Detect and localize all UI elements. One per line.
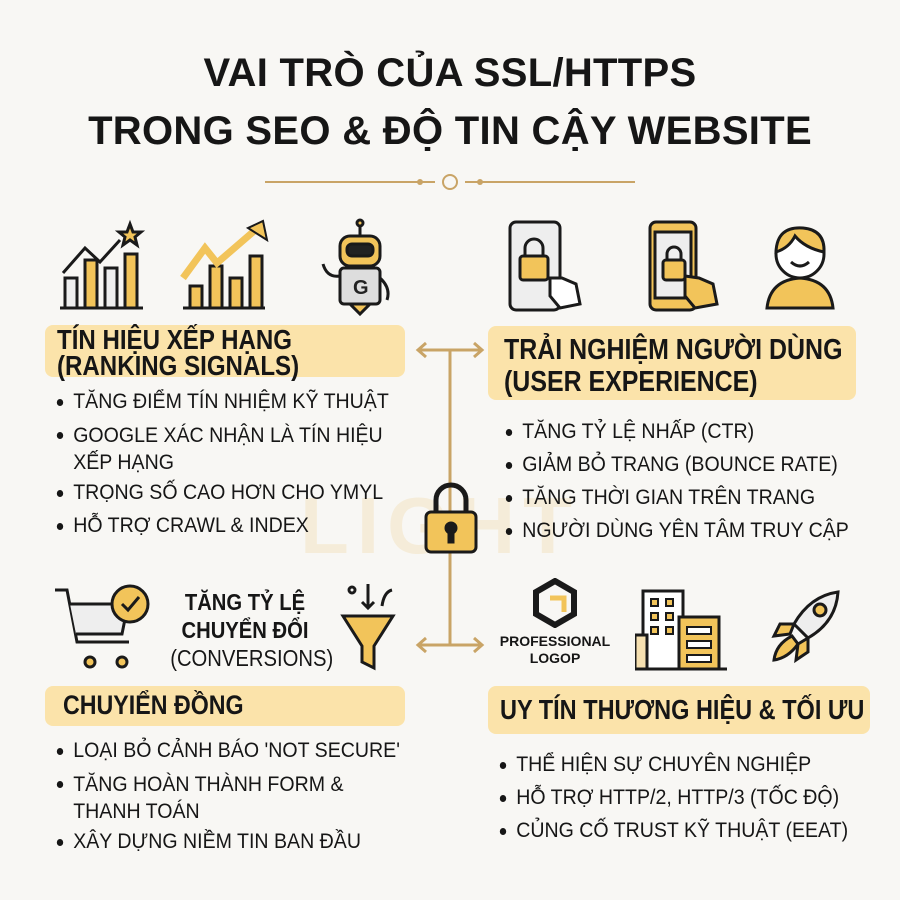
heading: ranking signals: TÍN HIỆU XẾP HẠNG <box>57 324 292 355</box>
heading: user experience: TRẢI NGHIỆM NGƯỜI DÙNG <box>504 334 842 366</box>
bullets: ranking: HỖ TRỢ CRAWL & INDEX <box>73 513 309 537</box>
heading: brand <box>488 686 870 734</box>
bullets: UX: TĂNG THỜI GIAN TRÊN TRANG <box>522 485 815 509</box>
icon: building <box>635 590 727 670</box>
icon: funnel <box>340 584 396 670</box>
icon: robot <box>323 220 388 314</box>
bullets: ranking: GOOGLE XÁC NHẬN LÀ TÍN HIỆU <box>73 423 383 447</box>
panel: conversion trust <box>45 686 405 853</box>
bullets: brand: HỖ TRỢ HTTP/2, HTTP/3 (TỐC ĐỘ) <box>516 785 839 809</box>
icon: robot: G <box>353 277 369 299</box>
icon: user <box>767 228 833 308</box>
heading: ranking signals <box>45 325 405 377</box>
center connector with arrows <box>416 342 484 653</box>
bullets: ranking: TRỌNG SỐ CAO HƠN CHO YMYL <box>73 480 383 504</box>
bullets: ranking: TĂNG ĐIỂM TÍN NHIỆM KỸ THUẬT <box>73 389 389 413</box>
bullets: brand: CỦNG CỐ TRUST KỸ THUẬT (EEAT) <box>516 818 848 842</box>
text: conversions: CHUYỂN ĐỔI <box>181 617 309 643</box>
watermark: LIGHT <box>300 481 580 570</box>
icons: ranking <box>60 218 390 316</box>
title <box>88 50 812 153</box>
divider ornament <box>265 174 635 190</box>
panel: ranking signals <box>45 324 405 537</box>
icon: phone lock 2 <box>650 222 717 310</box>
bullets: conversion <box>56 738 400 853</box>
icons: user experience <box>508 220 835 312</box>
icon: professional logo: LOGOP <box>530 650 580 666</box>
heading: chuyen dong: CHUYIỂN ĐỒNG <box>63 690 244 720</box>
bullets: UX <box>506 418 849 542</box>
icon: cart <box>55 584 150 668</box>
icon: phone lock <box>510 222 580 310</box>
bullets: conversion: TĂNG HOÀN THÀNH FORM & <box>73 772 344 796</box>
text: conversions: TĂNG TỶ LỆ <box>185 589 305 615</box>
text: conversions: (CONVERSIONS) <box>170 645 333 671</box>
icon: professional logo <box>500 578 610 666</box>
icon: rocket <box>772 590 840 664</box>
bullets: ranking: XẾP HẠNG <box>73 450 174 474</box>
conversions row <box>55 584 396 671</box>
bullets: UX: NGƯỜI DÙNG YÊN TÂM TRUY CẬP <box>522 518 849 542</box>
text: conversions <box>170 589 333 671</box>
bullets: UX: GIẢM BỎ TRANG (BOUNCE RATE) <box>522 452 838 476</box>
brand icons row <box>500 578 840 670</box>
heading: chuyen dong <box>45 686 405 726</box>
heading: brand: UY TÍN THƯƠNG HIỆU & TỐI ƯU <box>500 694 864 725</box>
icon: growth chart <box>183 221 267 308</box>
bullets: brand <box>500 752 848 842</box>
bullets: conversion: THANH TOÁN <box>73 799 200 823</box>
icon: central padlock <box>424 482 478 554</box>
panel: brand reputation <box>488 686 870 842</box>
heading: ranking signals: (RANKING SIGNALS) <box>57 350 299 381</box>
bullets: ranking <box>56 389 389 537</box>
heading: user experience <box>488 326 856 400</box>
icon: professional logo: PROFESSIONAL <box>500 633 610 649</box>
bullets: conversion: LOẠI BỎ CẢNH BÁO 'NOT SECURE' <box>73 738 400 762</box>
heading: user experience: (USER EXPERIENCE) <box>504 366 758 398</box>
title: VAI TRÒ CỦA SSL/HTTPS <box>204 51 696 95</box>
bullets: conversion: XÂY DỰNG NIỀM TIN BAN ĐẦU <box>73 829 361 853</box>
title: TRONG SEO & ĐỘ TIN CẬY WEBSITE <box>88 109 812 153</box>
bullets: brand: THỂ HIỆN SỰ CHUYÊN NGHIỆP <box>516 752 811 776</box>
panel: user experience <box>488 326 856 542</box>
icon: bar chart with star <box>60 224 143 308</box>
bullets: UX: TĂNG TỶ LỆ NHẤP (CTR) <box>522 419 754 443</box>
